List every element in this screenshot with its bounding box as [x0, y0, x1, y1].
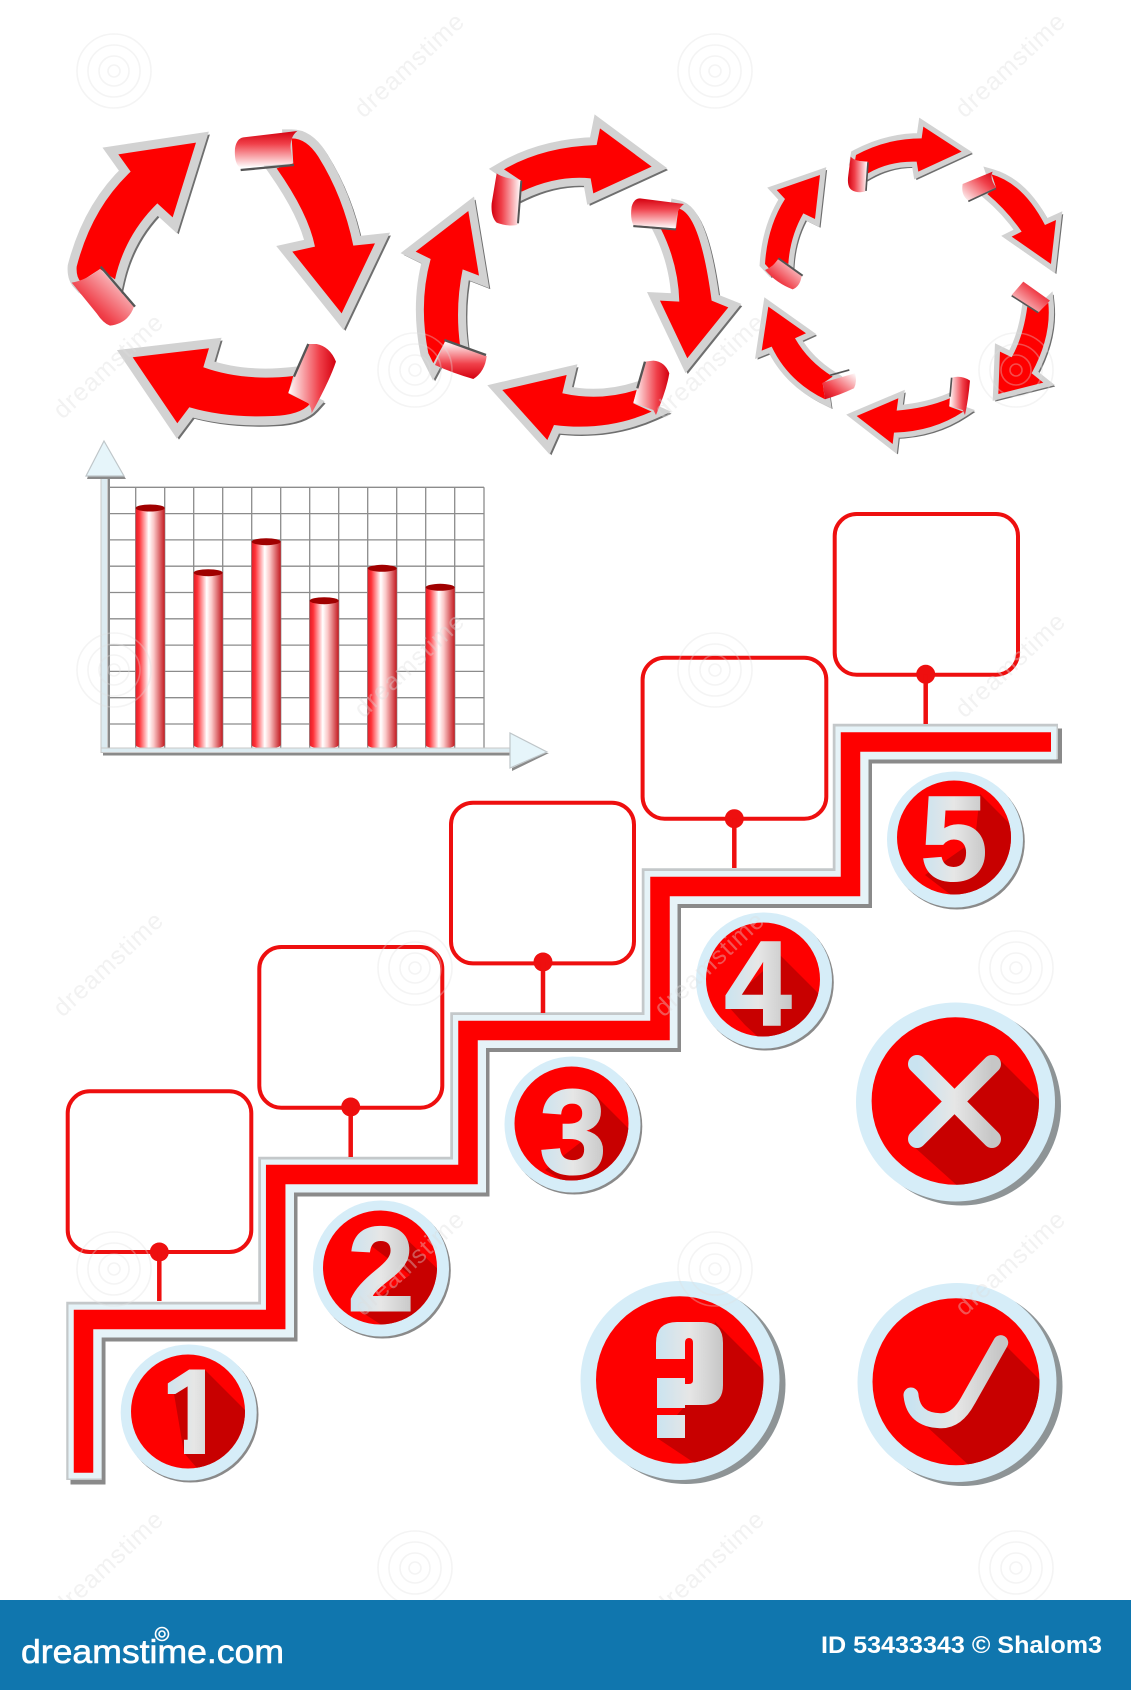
footer bar [0, 1600, 1131, 1690]
icon: question mark badge [580, 1281, 790, 1484]
x axis arrow [101, 733, 549, 771]
watermark diagonal text: dreamstime [349, 1205, 471, 1321]
callout box 1 [68, 1091, 251, 1301]
icon: check mark badge [858, 1283, 1062, 1486]
watermark diagonal text: dreamstime [950, 1205, 1072, 1321]
arrow: bottom [502, 361, 669, 442]
bar chart [86, 441, 549, 771]
watermark diagonal text: dreamstime [349, 607, 471, 723]
footer logo text: dreamstime.com [21, 1633, 284, 1670]
number badge 3: 3 [540, 1065, 606, 1199]
watermark diagonal text: dreamstime [48, 1505, 170, 1621]
bar 3 [252, 538, 281, 748]
watermark diagonal text: dreamstime [649, 1505, 771, 1621]
arrow: upper left [765, 175, 822, 289]
callout box 5 [835, 514, 1018, 724]
watermark diagonal text: dreamstime [349, 7, 471, 123]
icon: cross badge [856, 1002, 1061, 1206]
arrow cycle: six arrows [762, 127, 1058, 446]
arrow cycle: three arrows [72, 131, 377, 425]
y axis arrow [86, 441, 126, 752]
watermark diagonal text: dreamstime [950, 7, 1072, 123]
arrow: lower left [762, 307, 856, 401]
number badge 1: 1 [161, 1345, 227, 1479]
watermark diagonal text: dreamstime [48, 906, 170, 1022]
icon: logo spiral [156, 1628, 168, 1640]
arrow: top [492, 128, 654, 225]
number badge 4: 4 [725, 917, 792, 1051]
arrow: bottom [133, 344, 336, 425]
arrow: right [631, 198, 730, 360]
arrow: lower right [998, 282, 1050, 396]
number badge 3 [504, 1056, 642, 1194]
footer id and credit: ID 53433343 © Shalom3 [821, 1632, 1102, 1659]
arrow: right [235, 131, 377, 315]
number badge 4 [696, 912, 834, 1050]
number badge 2 [313, 1200, 451, 1338]
number badge 5 [887, 772, 1025, 910]
callout box 4 [643, 658, 826, 868]
arrow: upper left [72, 143, 198, 326]
number badge 1 [120, 1344, 258, 1482]
arrow: top [848, 127, 963, 192]
bar 6 [426, 584, 455, 748]
arrow cycle: four arrows [416, 128, 730, 442]
arrow: bottom [857, 377, 970, 446]
watermark diagonal text: dreamstime [649, 308, 771, 424]
bar 4 [310, 597, 339, 748]
bar 1 [136, 504, 165, 748]
arrow: upper right [962, 172, 1058, 266]
number badge 5: 5 [921, 772, 987, 906]
callout box 3 [451, 803, 634, 1013]
chart grid [107, 487, 484, 750]
watermark diagonal text: dreamstime [48, 308, 170, 424]
arrow: left [416, 211, 487, 379]
watermark diagonal text: dreamstime [649, 906, 771, 1022]
number badge 2: 2 [348, 1202, 414, 1336]
callout box 2 [259, 947, 442, 1157]
staircase timeline [84, 742, 1062, 1484]
watermark diagonal text: dreamstime [950, 607, 1072, 723]
bar 2 [194, 569, 223, 748]
bar 5 [368, 565, 397, 748]
